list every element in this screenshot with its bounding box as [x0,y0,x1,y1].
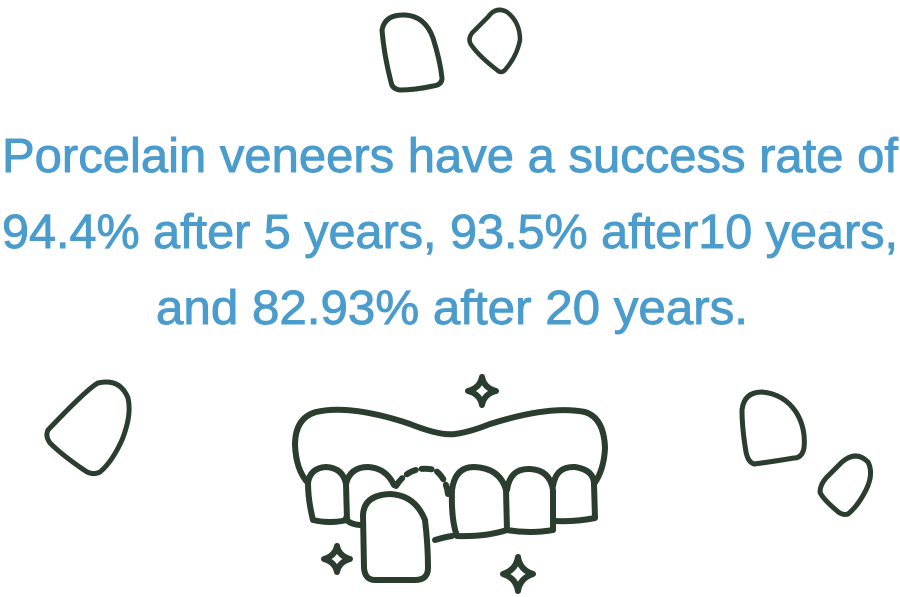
icon: veneer left [47,382,129,474]
headline text: and 82.93% after 20 years. [156,282,748,335]
teeth right [452,467,507,536]
icon: veneer top right [470,10,520,72]
headline text: 94.4% after 5 years, 93.5% after10 years, [2,206,898,259]
headline text: Porcelain veneers have a success rate of [2,130,899,183]
icon: veneer right [742,392,804,464]
dashed arc [396,469,448,494]
icon: veneer bottom right [820,456,871,514]
headline text [2,130,899,335]
sparkles [468,377,496,405]
icon: veneer top left [382,15,442,90]
front veneer [363,494,428,580]
gum arch [295,410,605,484]
teeth left [308,467,347,522]
icon: teeth with veneer [295,377,605,591]
